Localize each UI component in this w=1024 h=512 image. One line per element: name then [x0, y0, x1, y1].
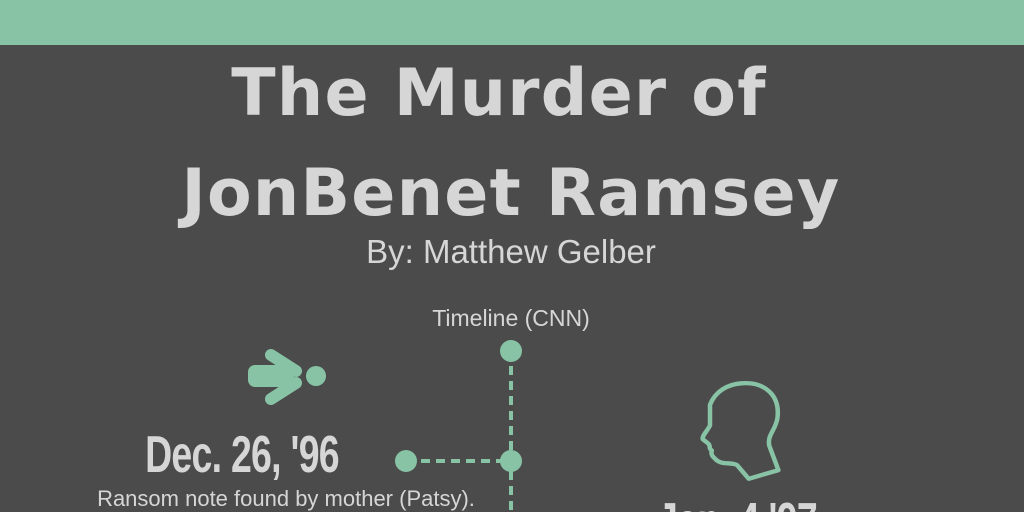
byline: By: Matthew Gelber: [366, 233, 656, 270]
icon: lying figure: [248, 349, 326, 405]
timeline heading: Timeline (CNN): [432, 305, 590, 331]
icon: head outline: [700, 381, 781, 481]
title: [178, 56, 841, 231]
date: Dec 26: Dec. 26, '96: [145, 426, 339, 484]
title: The Murder of: [231, 56, 767, 131]
caption: ransom note: Ransom note found by mother (Patsy).: [97, 486, 475, 511]
top banner: [0, 0, 1024, 45]
title: JonBenet Ramsey: [181, 156, 841, 231]
